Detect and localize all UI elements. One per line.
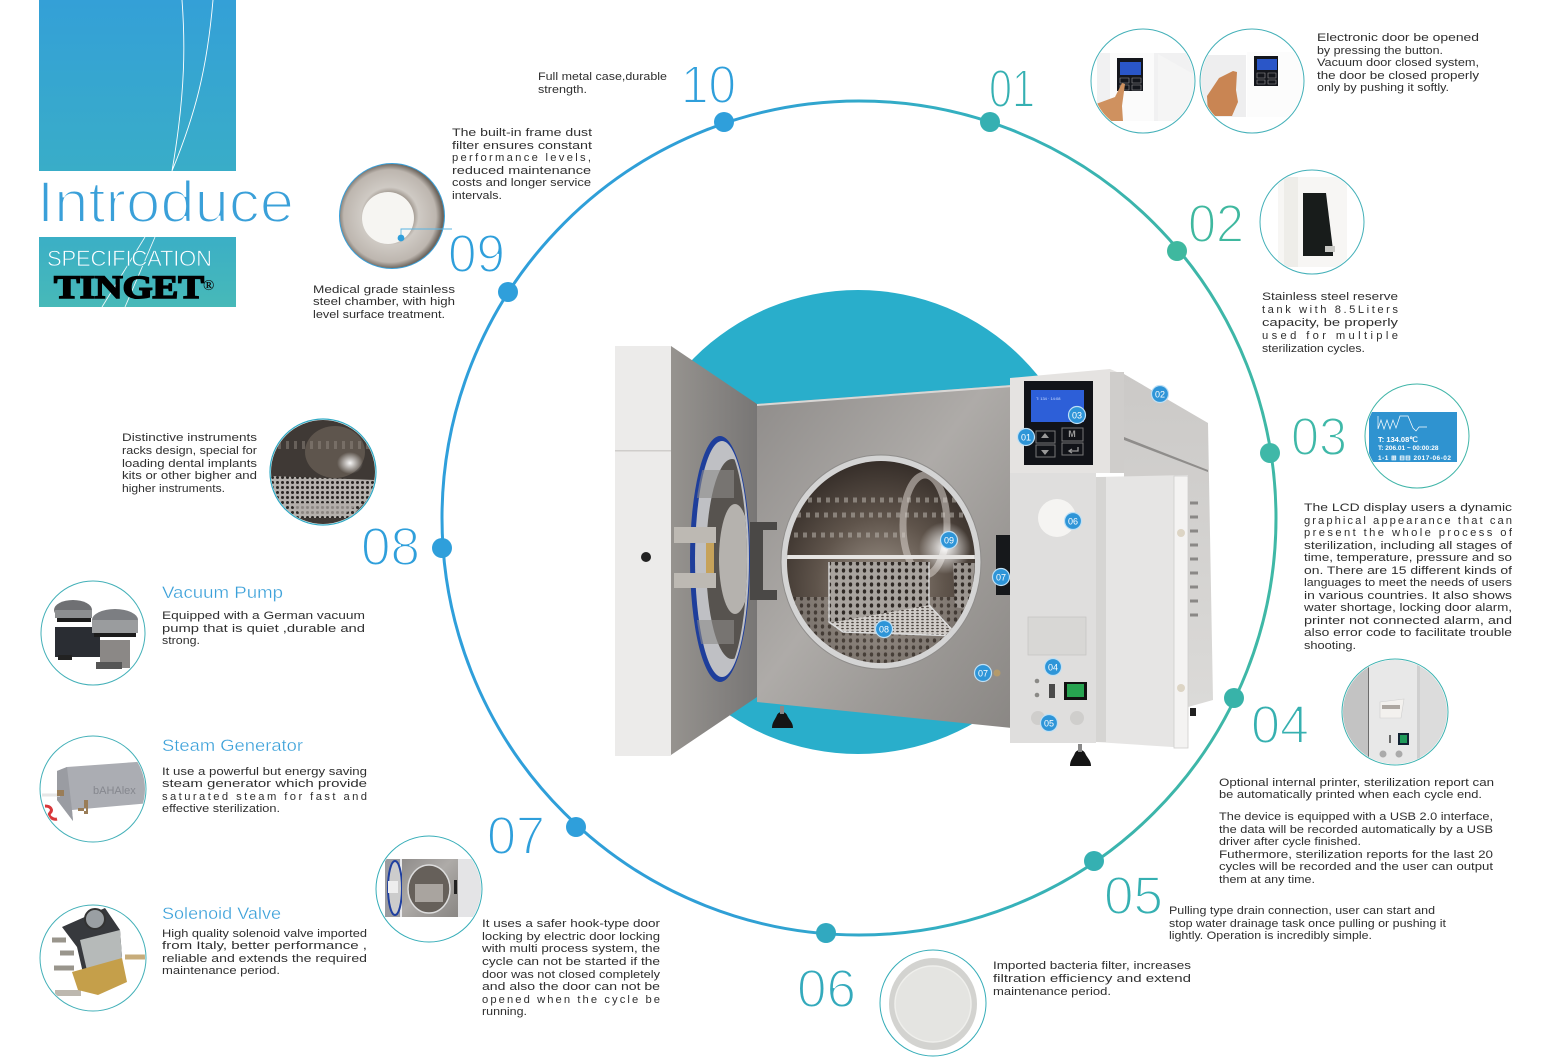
text: 09 dust filter: The built-in frame dust [452, 127, 593, 139]
section numbers: 10 [681, 55, 736, 115]
section numbers: 06 [797, 959, 856, 1019]
text: 01 electronic door: only by pushing it softly. [1317, 82, 1449, 94]
callout markers on machine: 05 [1044, 718, 1054, 728]
text: steam generator: saturated steam for fast and [162, 791, 367, 803]
text: 03 LCD: printer not connected alarm, and [1304, 615, 1512, 627]
section numbers: 04 [1251, 695, 1309, 755]
text: 03 LCD: present the whole process of [1304, 527, 1513, 539]
text: 09 chamber [313, 284, 455, 321]
text: 04 printer and USB: driver after cycle finished. [1219, 836, 1361, 848]
text: 07 door lock: cycle can not be started if the [482, 956, 660, 968]
machine side body [1124, 374, 1213, 725]
text: 01 electronic door: by pressing the button. [1317, 45, 1443, 57]
text: 02 reserve tank [1262, 291, 1399, 355]
text: solenoid valve: maintenance period. [162, 965, 280, 977]
text: 03 LCD [1303, 502, 1513, 652]
chamber interior and rack [785, 475, 980, 667]
text: 03 LCD: graphical appearance that can [1304, 515, 1512, 527]
chamber front plate [757, 385, 1012, 728]
text: 08 racks: kits or other bigher and [122, 470, 257, 482]
text: 03 LCD: sterilization, including all stages of [1304, 540, 1513, 552]
photo 04: internal printer [1342, 659, 1448, 765]
text: 09 chamber: level surface treatment. [313, 309, 445, 321]
text: 09 dust filter: intervals. [452, 190, 502, 202]
text: 02 reserve tank: sterilization cycles. [1262, 343, 1365, 355]
text: 05 drain [1169, 905, 1447, 942]
callout markers on machine: 09 [944, 536, 954, 546]
text: 04 printer and USB: Futhermore, sterilization reports for the last 20 [1219, 849, 1493, 861]
text: vacuum pump [162, 610, 365, 647]
photo 08: instrument rack [270, 419, 376, 525]
section numbers: 07 [487, 806, 545, 866]
text: vacuum pump: pump that is quiet ,durable and [162, 623, 365, 635]
text: 10 metal case: Full metal case,durable [538, 71, 667, 83]
text: steam generator: It use a powerful but energy saving [162, 766, 367, 778]
text: 05 drain: lightly. Operation is incredibly simple. [1169, 930, 1372, 942]
banner: specification TINGET: ® [203, 278, 214, 294]
text: 03 LCD: on. There are 15 different kinds of [1304, 565, 1513, 577]
text: 04 printer and USB: the data will be recorded automatically by a USB [1219, 824, 1493, 836]
text: 03 LCD: water shortage, locking door alarm, [1303, 602, 1512, 614]
photo 03: LCD display: T: 134.08℃ [1378, 435, 1418, 444]
text: 08 racks: racks design, special for [122, 445, 257, 457]
text: 01 electronic door: Electronic door be opened [1317, 32, 1479, 44]
text: 09 dust filter: costs and longer service [452, 177, 591, 189]
section numbers: 03 [1291, 407, 1347, 467]
text: 06 filter: Imported bacteria filter, increases [993, 960, 1191, 972]
heading: Solenoid Valve: Solenoid Valve [162, 905, 281, 923]
photo 02: reserve tank [1260, 170, 1364, 274]
text: 03 LCD: also error code to facilitate trouble [1304, 627, 1512, 639]
lower front panel [1010, 473, 1096, 743]
section numbers: 05 [1104, 866, 1163, 926]
text: 01 electronic door: the door be closed properly [1317, 70, 1479, 82]
section numbers: 01 [989, 59, 1035, 119]
banner: specification TINGET: TINGET [54, 270, 204, 306]
section numbers [361, 55, 1347, 1019]
text: 04 printer and USB: cycles will be recorded and the user can output [1219, 861, 1494, 873]
text: 10 metal case [538, 71, 667, 96]
text: 04 printer and USB [1219, 777, 1494, 886]
text: 01 electronic door: Vacuum door closed system, [1317, 57, 1479, 69]
text: 09 chamber: Medical grade stainless [313, 284, 455, 296]
text: solenoid valve: High quality solenoid valve imported [162, 928, 367, 940]
text: 07 door lock: running. [482, 1006, 527, 1018]
text: 07 door lock: It uses a safer hook-type door [482, 918, 660, 930]
photo 01b: hand pushing door [1200, 29, 1304, 133]
text: 09 dust filter: filter ensures constant [452, 140, 593, 152]
section numbers: 02 [1188, 194, 1244, 254]
text: 07 door lock: door was not closed completely [482, 969, 660, 981]
photo 03: LCD display: T: 206.01 ~ 00:00:28 [1378, 445, 1439, 452]
text: 09 chamber: steel chamber, with high [313, 296, 455, 308]
callout markers on machine [876, 386, 1168, 732]
photo: vacuum pump [41, 581, 145, 685]
banner: specification TINGET [39, 237, 236, 307]
section numbers: 09 [448, 224, 505, 284]
text: 08 racks: higher instruments. [122, 483, 225, 495]
central teal circle [626, 290, 1090, 754]
adjustable feet [772, 706, 1091, 766]
text: 07 door lock: with multi process system, the [481, 943, 660, 955]
callout markers on machine: 07 [978, 668, 988, 678]
text: 03 LCD: time, temperature, pressure and so [1304, 552, 1512, 564]
text: 01 electronic door [1317, 32, 1479, 94]
callout markers on machine: 04 [1048, 662, 1058, 672]
text: 10 metal case: strength. [538, 84, 587, 96]
heading: Steam Generator: Steam Generator [162, 737, 304, 755]
text: 09 dust filter [452, 127, 593, 202]
header block: blue square [39, 0, 236, 171]
photo 06: bacteria filter [880, 950, 986, 1056]
text: 04 printer and USB: be automatically printed when each cycle end. [1219, 789, 1482, 801]
text: 07 door lock: opened when the cycle be [482, 994, 660, 1006]
door outer panel [615, 346, 671, 756]
text: vacuum pump: Equipped with a German vacuum [162, 610, 365, 622]
text: 04 printer and USB: Optional internal printer, sterilization report can [1219, 777, 1494, 789]
text: 07 door lock: and also the door can not be [482, 981, 660, 993]
control housing [1010, 369, 1124, 473]
text: 06 filter [993, 960, 1191, 998]
photo 07: door lock [376, 836, 482, 942]
text: 09 dust filter: reduced maintenance [452, 165, 591, 177]
text: 04 printer and USB: them at any time. [1219, 874, 1315, 886]
autoclave machine illustration [615, 346, 1213, 766]
text: 08 racks [122, 432, 257, 495]
ring nodes [432, 112, 1280, 943]
text: 03 LCD: The LCD display users a dynamic [1304, 502, 1512, 514]
text: 03 LCD: shooting. [1304, 640, 1356, 652]
text: 05 drain: stop water drainage task once pulling or pushing it [1169, 918, 1447, 930]
photo: steam generator: bAHAlex [93, 785, 136, 797]
text: 02 reserve tank: used for multiple [1262, 330, 1398, 342]
control housing: T: 134 · 14:08 [1036, 396, 1061, 401]
text: solenoid valve [162, 928, 367, 977]
text: 07 door lock [481, 918, 660, 1018]
title: Introduce: Introduce [37, 170, 294, 235]
text: 08 racks: Distinctive instruments [122, 432, 257, 444]
text: steam generator [162, 766, 367, 815]
text: vacuum pump: strong. [162, 635, 200, 647]
photo 01a: finger on keypad [1091, 29, 1195, 133]
text: 06 filter: maintenance period. [993, 986, 1111, 998]
callout markers on machine: 08 [879, 624, 889, 634]
text: solenoid valve: reliable and extends the required [162, 953, 367, 965]
control housing: M [1068, 429, 1076, 439]
callout markers on machine: 03 [1072, 410, 1082, 420]
text: 03 LCD: languages to meet the needs of users [1304, 577, 1512, 589]
open side cover [1096, 475, 1188, 748]
timeline ring [442, 101, 1276, 935]
text: 02 reserve tank: capacity, be properly [1262, 317, 1399, 329]
text: 06 filter: filtration efficiency and extend [993, 973, 1191, 985]
text: 05 drain: Pulling type drain connection, user can start and [1169, 905, 1435, 917]
section numbers: 08 [361, 517, 420, 577]
text: 07 door lock: locking by electric door locking [482, 931, 660, 943]
photo 09: stainless chamber [340, 164, 452, 268]
text: 02 reserve tank: tank with 8.5Liters [1262, 304, 1398, 316]
callout markers on machine: 06 [1068, 516, 1078, 526]
text: 04 printer and USB: The device is equipped with a USB 2.0 interface, [1219, 811, 1493, 823]
banner: specification TINGET: SPECIFICATION [47, 246, 212, 271]
open door inner [671, 346, 777, 755]
text: solenoid valve: from Italy, better performance , [162, 940, 367, 952]
text: 09 dust filter: performance levels, [452, 152, 591, 164]
photo: steam generator [40, 736, 150, 842]
text: 02 reserve tank: Stainless steel reserve [1262, 291, 1398, 303]
text: steam generator: steam generator which provide [162, 778, 367, 790]
callout markers on machine: 01 [1021, 432, 1031, 442]
text: steam generator: effective sterilization. [162, 803, 280, 815]
photo: solenoid valve [40, 905, 149, 1011]
heading: Vacuum Pump: Vacuum Pump [162, 584, 283, 602]
photo 03: LCD display [1365, 384, 1469, 488]
photo 03: LCD display: 1-1 ⊞ ⊟⊟ 2017-06-02 [1378, 455, 1451, 462]
text: 08 racks: loading dental implants [122, 458, 257, 470]
text: 03 LCD: in various countries. It also shows [1304, 590, 1512, 602]
callout markers on machine: 02 [1155, 390, 1165, 400]
callout markers on machine: 07 [996, 572, 1006, 582]
